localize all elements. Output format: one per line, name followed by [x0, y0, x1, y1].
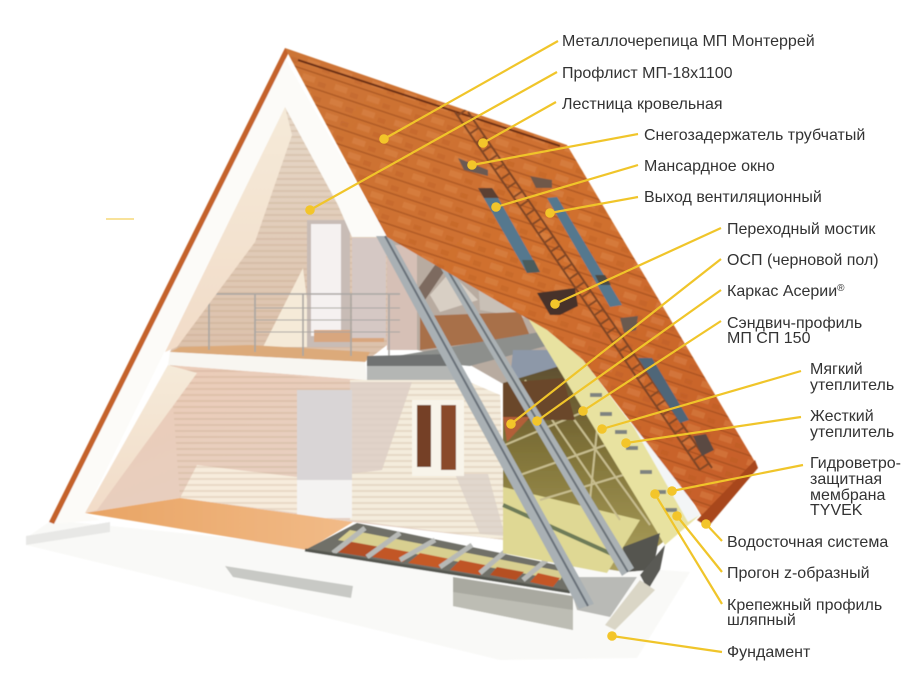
- label: Прогон: Прогон z-образный: [727, 565, 870, 582]
- steel rafter 2 shadow: [438, 254, 628, 572]
- callout: Гидроветрозащитная мембрана: [667, 465, 803, 496]
- callout: Металлочерепица: [379, 41, 558, 144]
- label: Переходный мостик: Переходный мостик: [727, 221, 876, 238]
- label: Гидроветрозащитная мембрана: защитная: [810, 471, 882, 488]
- plinth dark side: [640, 545, 665, 590]
- rake edge trim: [49, 48, 289, 524]
- label: Профлист: Профлист МП-18х1100: [562, 65, 733, 82]
- lower storey back wall: [85, 365, 505, 540]
- label: Каркас: ®: [837, 283, 845, 294]
- steel rafter 2: [430, 250, 634, 576]
- foundation slab: [26, 520, 690, 660]
- house illustration: [26, 47, 759, 631]
- callout: Водосточная система: [701, 519, 722, 541]
- fastening clips: [590, 395, 677, 510]
- steel rafter 1 shadow: [385, 236, 588, 606]
- callout: Мягкий утеплитель: [597, 371, 801, 434]
- label: Мансардное окно: Мансардное окно: [644, 158, 775, 175]
- yellow insulation strip: [523, 310, 700, 545]
- concrete floor: [567, 577, 637, 617]
- callout: Каркас: [532, 290, 721, 426]
- roof window 2: [547, 197, 622, 307]
- ridge line: [298, 60, 560, 146]
- label: Водосточная система: Водосточная система: [727, 534, 888, 551]
- white gable frame: [50, 58, 387, 524]
- label: Мягкий утеплитель: утеплитель: [810, 377, 894, 394]
- roof: [285, 48, 759, 526]
- label: Металлочерепица: Металлочерепица МП Монтеррей: [562, 33, 815, 50]
- label: Гидроветрозащитная мембрана: Гидроветро-: [810, 455, 901, 472]
- callout: Жесткий утеплитель: [621, 417, 801, 448]
- callout: Лестница: [478, 102, 556, 148]
- label: Крепежный профиль: Крепежный профиль: [727, 597, 882, 614]
- plinth light side: [605, 580, 655, 630]
- label: Фундамент: Фундамент: [727, 644, 811, 661]
- callout: Сэндвич-профиль: [578, 321, 721, 416]
- reveal of the gable, upper part: [165, 107, 292, 352]
- callout: Выход вентиляционный: [545, 197, 638, 218]
- balcony slab: [168, 352, 367, 380]
- interior behind rafters: [385, 237, 562, 385]
- label: Каркас: Каркас Асерии: [727, 283, 837, 300]
- callout: Фундамент: [607, 631, 722, 652]
- door: [297, 390, 352, 518]
- label: Сэндвич-профиль: МП СП 150: [727, 330, 811, 347]
- callout: Крепежный профиль: [650, 489, 722, 604]
- roof window 3: [638, 358, 689, 423]
- upper door opening: [307, 220, 386, 347]
- label: Мягкий утеплитель: Мягкий: [810, 361, 863, 378]
- sandwich-profile wall with insulation: [503, 365, 663, 573]
- callout: Мансардное окно: [491, 165, 638, 212]
- label: Снегозадержатель: Снегозадержатель трубчатый: [644, 127, 865, 144]
- roof ladder: [455, 112, 712, 470]
- label: Лестница: Лестница кровельная: [562, 96, 723, 113]
- callout: Переходный мостик: [550, 228, 721, 309]
- membrane strip: [610, 380, 700, 522]
- callout: Прогон: [672, 511, 722, 572]
- label: Жесткий утеплитель: утеплитель: [810, 424, 894, 441]
- label: Гидроветрозащитная мембрана: TYVEK: [810, 502, 863, 519]
- wood floor: [85, 498, 353, 550]
- upper floor boards: [170, 345, 370, 362]
- label: ОСП: ОСП (черновой пол): [727, 252, 879, 269]
- label: Гидроветрозащитная мембрана: мембрана: [810, 487, 886, 504]
- callout: Профлист: [305, 72, 557, 215]
- reveal of the gable, lower part: [85, 365, 197, 513]
- lower window: [412, 400, 464, 476]
- upper storey interior: [170, 107, 387, 362]
- gutter: [697, 460, 758, 527]
- label: Выход вентиляционный: Выход вентиляционный: [644, 189, 822, 206]
- balcony railing: [207, 294, 400, 356]
- decorative streak: [106, 218, 134, 220]
- ventilation outlet 1: [530, 176, 552, 188]
- ventilation outlet 3: [693, 434, 714, 456]
- label: Крепежный профиль: шляпный: [727, 612, 796, 629]
- lower eave cavity: [623, 533, 660, 572]
- label: Сэндвич-профиль: Сэндвич-профиль: [727, 315, 862, 332]
- lower wall siding: [170, 365, 505, 540]
- steel rafter 1: [376, 236, 594, 609]
- steel floor beam: [367, 354, 470, 380]
- callout: Снегозадержатель: [467, 134, 638, 170]
- upper wall sunlit patch: [263, 268, 313, 347]
- ventilation outlet 2: [620, 316, 638, 333]
- snow guard: [458, 158, 488, 176]
- callout: ОСП: [506, 259, 721, 429]
- label: Жесткий утеплитель: Жесткий: [810, 408, 874, 425]
- walkway bridge: [537, 288, 578, 315]
- floor joists: [305, 523, 590, 600]
- roof window 1: [478, 188, 540, 273]
